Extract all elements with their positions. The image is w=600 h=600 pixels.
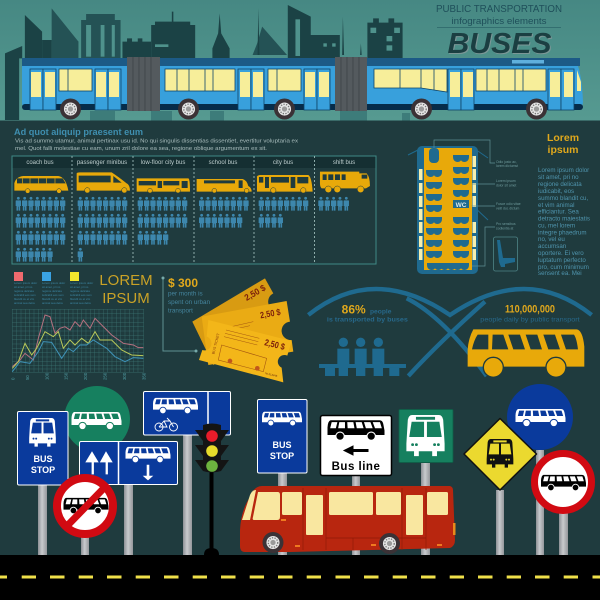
column labels bbox=[26, 160, 355, 166]
chart heading: IPSUM bbox=[102, 290, 150, 307]
red bus bbox=[240, 486, 456, 554]
sidebar text: integre phaedrum bbox=[538, 230, 586, 236]
yellow bus silhouettes bbox=[14, 172, 370, 193]
sidebar text: cu, mel lorem bbox=[538, 222, 575, 230]
bicycle icon bbox=[155, 418, 178, 431]
seat detail icon bbox=[494, 237, 518, 271]
people on bench bbox=[319, 338, 406, 376]
chart axis labels: 150 bbox=[64, 372, 69, 380]
table header band bbox=[12, 156, 376, 168]
sidebar text: detracto maiestatis bbox=[538, 216, 590, 222]
sidebar text bbox=[538, 132, 590, 277]
header title: infographics elements bbox=[452, 16, 547, 27]
line chart bbox=[10, 309, 146, 380]
seat plan diagram bbox=[408, 140, 521, 274]
sign: bus stop left bbox=[18, 412, 68, 485]
chart legend: iudicabit eos sum bbox=[70, 293, 92, 297]
shift bus bbox=[320, 172, 370, 193]
sign: bus stop centre: BUS bbox=[272, 440, 292, 450]
chart axis labels: 100 bbox=[44, 372, 49, 380]
chart axis labels: 300 bbox=[122, 372, 127, 380]
chart legend: sit amet, pri no bbox=[14, 285, 33, 289]
red bus details bbox=[303, 488, 426, 550]
spending callout: $ 300 bbox=[168, 276, 198, 290]
callout labels: Odio justo ac, bbox=[496, 160, 517, 164]
bus tickets bbox=[192, 278, 293, 382]
header band bbox=[0, 0, 600, 120]
WC label: WC bbox=[456, 202, 467, 209]
bus body bbox=[22, 66, 583, 110]
city skyline bbox=[5, 5, 403, 120]
sign: bus line bbox=[320, 416, 392, 476]
chart legend: regione delicata bbox=[14, 289, 34, 293]
column labels: city bus bbox=[273, 160, 293, 166]
lane markings bbox=[0, 576, 600, 578]
driver seat bbox=[429, 148, 439, 163]
red bus windows bbox=[242, 490, 448, 535]
callout labels: velit dui, dictum bbox=[496, 206, 520, 210]
chart axis labels: 200 bbox=[83, 372, 88, 380]
column labels: school bus bbox=[209, 160, 237, 166]
chart legend: blandit cu et vim bbox=[42, 297, 63, 301]
side windows bbox=[419, 156, 476, 260]
header title: PUBLIC TRANSPORTATION bbox=[436, 4, 562, 15]
skyline reflections under bus bbox=[90, 111, 410, 120]
chart legend: sit amet, pri no bbox=[70, 285, 89, 289]
yellow bus bbox=[468, 329, 584, 377]
traffic light bbox=[195, 424, 229, 555]
front ticket: № 012345 bbox=[265, 371, 278, 378]
pink series bbox=[12, 315, 143, 367]
door glass bbox=[31, 70, 581, 97]
passenger pictograms bbox=[16, 197, 349, 262]
chart legend: animal sea detra bbox=[14, 301, 35, 305]
chart legend: iudicabit eos sum bbox=[42, 293, 64, 297]
chart axis labels bbox=[10, 372, 146, 380]
chart legend bbox=[14, 272, 93, 305]
sidebar text: Lorem ipsum dolor bbox=[538, 167, 589, 174]
stat: 110,000,000: 110,000,000 bbox=[505, 304, 555, 316]
road bbox=[0, 555, 600, 600]
chart axis labels: 250 bbox=[102, 372, 107, 380]
sidebar text: sensent ea. Mei bbox=[538, 270, 582, 277]
callout labels: sodientia at bbox=[496, 226, 513, 230]
callout labels: Fusce odio vitae bbox=[496, 202, 521, 206]
panel: bus capacity table bbox=[12, 156, 376, 264]
bus bellows bbox=[127, 57, 367, 111]
front ticket: BUS TICKET bbox=[211, 332, 221, 355]
sidebar text: et vim animal bbox=[538, 202, 574, 209]
sidebar text: accumsan bbox=[538, 243, 567, 250]
chart heading bbox=[99, 272, 153, 307]
chart axis labels: 350 bbox=[141, 372, 146, 380]
sign: blue circle bus bbox=[507, 384, 573, 450]
arcs and statistics bbox=[308, 289, 592, 377]
stat: 86 percent: is transported by buses bbox=[327, 317, 408, 324]
callout labels: Lorem ipsum bbox=[496, 179, 516, 183]
column labels: passenger minibus bbox=[77, 160, 127, 166]
sign: bus stop left: BUS bbox=[33, 454, 53, 464]
chart legend: blandit cu et vim bbox=[70, 297, 91, 301]
front ticket bbox=[199, 320, 292, 382]
chart legend: regione delicata bbox=[42, 289, 62, 293]
chart legend: blandit cu et vim bbox=[14, 297, 35, 301]
callout labels: dolor sit amet bbox=[496, 184, 516, 188]
chart axis labels: 50 bbox=[25, 375, 30, 380]
sign: bus stop left: STOP bbox=[31, 465, 55, 475]
header title: BUSES bbox=[448, 29, 553, 61]
intro text: mel. Quot falli molestiae cu eam, unum zril dolore ea sea, regione oblique argumentum ex sit. bbox=[15, 146, 268, 152]
column labels: low-floor city bus bbox=[141, 160, 185, 166]
chart legend: regione delicata bbox=[70, 289, 90, 293]
sidebar text: oportere. Ei vero bbox=[538, 250, 584, 257]
back ticket: 2,50 $ bbox=[243, 283, 267, 303]
bus floor outline bbox=[417, 146, 478, 274]
seats bbox=[426, 155, 469, 270]
callout labels: lorem dictumst bbox=[496, 164, 518, 168]
sidebar text: regione delicata bbox=[538, 181, 582, 188]
sidebar text: sit amet, pri no bbox=[538, 174, 579, 181]
table border bbox=[12, 156, 376, 264]
stat: 110,000,000: people daily by public transport bbox=[480, 317, 580, 324]
stat: 110,000,000 bbox=[480, 304, 580, 324]
chart axis labels: 0 bbox=[10, 377, 15, 380]
sidebar text: pro, cum minimum bbox=[538, 264, 589, 271]
sign: bus line: Bus line bbox=[332, 461, 380, 473]
chart legend: sit amet, pri no bbox=[42, 285, 61, 289]
bus windows bbox=[59, 69, 546, 92]
chart legend: Lorem ipsum dolor bbox=[42, 281, 65, 285]
sign: no buses bbox=[57, 478, 113, 534]
city bus bbox=[257, 175, 313, 193]
low-floor bus bbox=[137, 178, 190, 193]
sidebar text: ipsum bbox=[548, 144, 578, 156]
chart legend: animal sea detra bbox=[42, 301, 63, 305]
stat: 86 percent: 86% bbox=[342, 302, 366, 316]
minibus bbox=[77, 172, 130, 193]
middle ticket: 2,50 $ bbox=[259, 307, 281, 320]
chart heading: LOREM bbox=[99, 272, 153, 289]
spending callout: spent on urban bbox=[168, 299, 211, 306]
sign: green front bus bbox=[399, 410, 453, 462]
header title: BUSES bbox=[448, 28, 552, 60]
red bus wheels bbox=[262, 532, 284, 553]
intro text bbox=[14, 127, 298, 152]
header title bbox=[436, 4, 562, 61]
chart legend: Lorem ipsum dolor bbox=[14, 281, 37, 285]
chart legend: animal sea detra bbox=[70, 301, 91, 305]
spending callout: transport bbox=[168, 308, 193, 314]
intro text: Ad quot aliquip praesent eum bbox=[14, 127, 143, 137]
chart legend: Lorem ipsum dolor bbox=[70, 281, 93, 285]
sign: bus stop centre bbox=[258, 400, 307, 473]
chart legend: iudicabit eos sum bbox=[14, 293, 36, 297]
callout labels: Pro sensibus bbox=[496, 222, 516, 226]
sign: bus and bicycle lane bbox=[144, 391, 230, 435]
bus wheels bbox=[60, 98, 547, 120]
chart grid bbox=[12, 309, 144, 372]
column labels: shift bus bbox=[333, 160, 355, 166]
front ticket: 2,50 $ bbox=[263, 337, 286, 352]
sidebar text: luptatum perfecto bbox=[538, 257, 586, 264]
sign: yellow diamond bbox=[464, 418, 536, 490]
column labels: coach bus bbox=[26, 160, 54, 166]
intro text: Vis ad summo utamur, animal pertinax usu id. No qui singulis dissentias dissentiet, evertitur voluptaria ex bbox=[15, 138, 298, 144]
arc graphic bbox=[308, 289, 592, 376]
yellow series bbox=[12, 332, 143, 368]
stat: 86 percent bbox=[327, 302, 408, 324]
sign: bus lane arrows bbox=[80, 441, 178, 485]
sidebar text: iudicabit, eos bbox=[538, 188, 574, 195]
sidebar text: efficiantur. Sea bbox=[538, 208, 579, 216]
sign: red circle bus bbox=[534, 454, 592, 510]
sign poles bbox=[38, 435, 568, 555]
bus roof bbox=[22, 58, 580, 66]
coach bus bbox=[14, 176, 68, 193]
spending callout: per month is bbox=[168, 290, 203, 298]
stat: 86 percent: people bbox=[370, 308, 392, 315]
callout lines bbox=[434, 140, 495, 266]
sidebar text: no, vel eu bbox=[538, 236, 565, 243]
sign: green circle bus bbox=[64, 386, 130, 452]
spending callout bbox=[162, 276, 211, 352]
school bus bbox=[197, 179, 252, 193]
blue series bbox=[12, 340, 143, 372]
sign: bus stop centre: STOP bbox=[270, 451, 294, 461]
sidebar text: Lorem bbox=[547, 132, 579, 144]
bus doors bbox=[30, 69, 574, 110]
articulated blue bus bbox=[22, 57, 583, 120]
callout labels bbox=[496, 160, 521, 230]
sidebar text: summo blandit cu, bbox=[538, 195, 588, 202]
